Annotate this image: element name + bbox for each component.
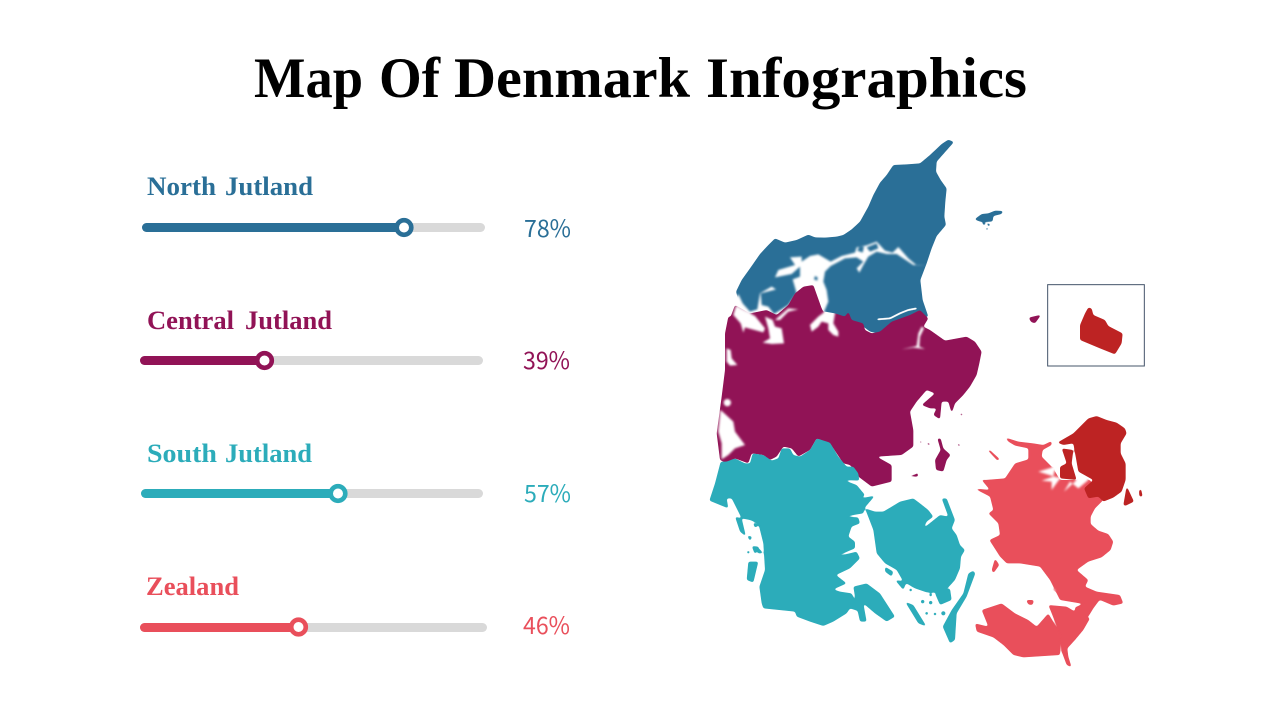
value: 39%: 39% <box>523 341 570 376</box>
title: Denmark <box>454 47 690 110</box>
island: Als and small islands <box>735 517 975 643</box>
title: Infographics <box>706 47 1027 110</box>
label: Central Jutland: Jutland <box>245 306 333 335</box>
region: South Jutland <box>709 438 975 643</box>
island: Lolland <box>975 603 1060 657</box>
label: North Jutland: North <box>147 172 217 201</box>
inset frame: Bornholm <box>1048 285 1144 366</box>
panel: Zealand progress <box>140 572 570 641</box>
label: South Jutland: South <box>147 439 218 468</box>
panel: South Jutland progress <box>141 439 571 509</box>
label: Central Jutland: Central <box>147 306 234 335</box>
label: North Jutland <box>147 172 314 201</box>
island: Bornholm <box>1080 307 1123 354</box>
slider: 39 percent <box>140 353 483 368</box>
region: Capital Region <box>1057 416 1143 506</box>
label: North Jutland: Jutland <box>225 172 314 201</box>
region: Central Jutland <box>717 285 982 487</box>
value: 46%: 46% <box>523 606 570 641</box>
slider: 57 percent <box>141 486 483 501</box>
title: Of <box>379 47 441 110</box>
label: Central Jutland <box>147 306 333 335</box>
region: Anholt island <box>1029 315 1041 323</box>
title <box>254 47 1027 110</box>
map of Denmark <box>709 140 1144 667</box>
island: Falster <box>1048 605 1090 667</box>
region: Zealand <box>968 437 1123 667</box>
small islands <box>987 450 1100 617</box>
slider: 46 percent <box>140 620 487 634</box>
value: 78%: 78% <box>524 209 571 244</box>
label: South Jutland: Jutland <box>225 439 313 468</box>
value: 57%: 57% <box>524 474 571 509</box>
panel: Central Jutland progress <box>140 306 570 376</box>
region: Laeso island <box>974 211 1003 232</box>
panel: North Jutland progress <box>142 172 571 244</box>
region: North Jutland <box>733 140 954 337</box>
label: Zealand: Zealand <box>146 572 240 601</box>
title: Map <box>254 47 363 110</box>
slider: 78 percent <box>142 220 485 235</box>
island: Funen <box>865 498 965 593</box>
label: South Jutland <box>147 439 313 468</box>
